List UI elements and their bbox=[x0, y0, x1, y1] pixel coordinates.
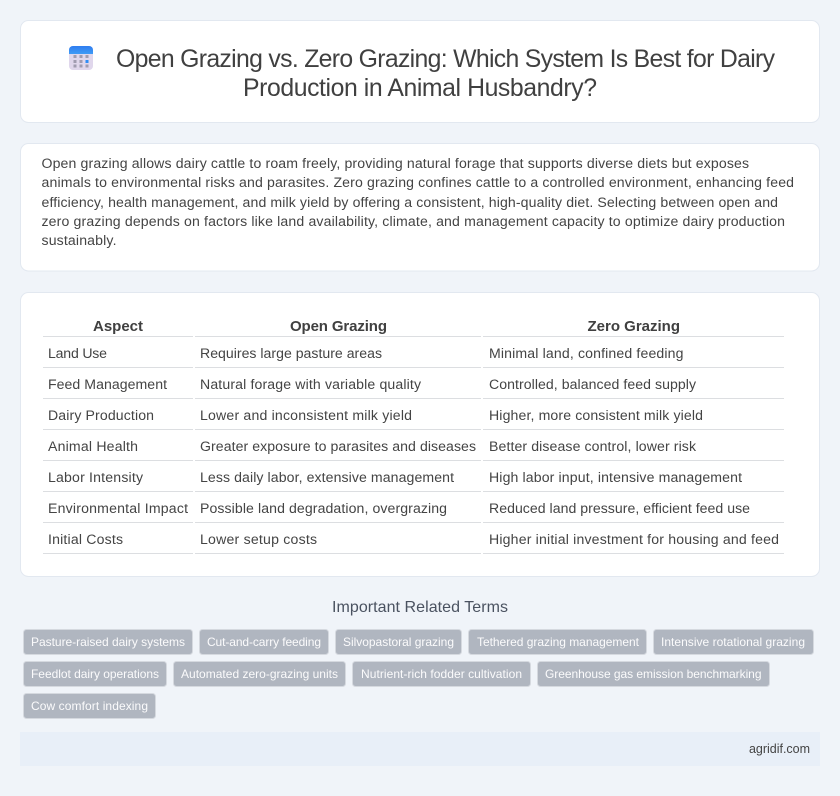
row: initial costs: Initial Costs bbox=[48, 531, 123, 547]
row: initial costs: Higher initial investment for housing and feed bbox=[489, 531, 779, 547]
table header: Aspect bbox=[93, 318, 143, 335]
text block: introduction paragraph: animals to environmental risks and parasites. Zero grazing confines cattle to a controlled environment, enhancing feed bbox=[42, 174, 794, 190]
row: initial costs: Lower setup costs bbox=[200, 531, 317, 547]
tag: Cow comfort indexing bbox=[31, 699, 148, 713]
row: land use: Land Use bbox=[48, 345, 107, 361]
row: dairy production: Lower and inconsistent milk yield bbox=[200, 407, 412, 423]
tag: Cut-and-carry feeding bbox=[207, 635, 321, 649]
tag: Intensive rotational grazing bbox=[661, 635, 805, 649]
row: labor intensity: Labor Intensity bbox=[48, 469, 144, 485]
tag bbox=[24, 694, 156, 718]
tag: Pasture-raised dairy systems bbox=[31, 635, 185, 649]
row: environmental impact: Possible land degradation, overgrazing bbox=[200, 500, 447, 516]
tag: Automated zero-grazing units bbox=[181, 667, 338, 681]
row: land use bbox=[43, 345, 784, 368]
row: dairy production: Higher, more consistent milk yield bbox=[489, 407, 703, 423]
icon: calendar bbox=[69, 46, 93, 70]
text block: introduction paragraph: Open grazing allows dairy cattle to roam freely, providing natural forage that supports diverse diets but exposes bbox=[42, 155, 749, 171]
row: labor intensity bbox=[43, 469, 784, 492]
tag bbox=[24, 630, 192, 654]
panel: title card bbox=[20, 20, 820, 122]
panel: comparison table bbox=[20, 292, 820, 576]
row: dairy production: Dairy Production bbox=[48, 407, 154, 423]
tag bbox=[538, 662, 770, 686]
text block: introduction paragraph bbox=[42, 155, 794, 248]
footer: agridif.com bbox=[749, 742, 810, 756]
tag bbox=[200, 630, 328, 654]
table header bbox=[43, 318, 784, 336]
tag bbox=[654, 630, 814, 654]
row: feed management: Feed Management bbox=[48, 376, 167, 392]
tag bbox=[174, 662, 346, 686]
table header: Zero Grazing bbox=[588, 318, 680, 335]
row: environmental impact: Reduced land pressure, efficient feed use bbox=[489, 500, 750, 516]
row: animal health: Greater exposure to parasites and diseases bbox=[200, 438, 476, 454]
tag: Feedlot dairy operations bbox=[31, 667, 159, 681]
row: land use: Requires large pasture areas bbox=[200, 345, 382, 361]
text block: introduction paragraph: efficiency, health management, and milk yield by offering a consistent, high-quality diet. Selecting between open and bbox=[42, 194, 778, 210]
footer bbox=[20, 732, 820, 766]
title: Open Grazing vs. Zero Grazing: Which System Is Best for Dairy bbox=[116, 46, 776, 73]
table header: Open Grazing bbox=[290, 318, 387, 335]
row: feed management: Controlled, balanced feed supply bbox=[489, 376, 697, 392]
panel: introduction bbox=[20, 144, 820, 271]
title: Production in Animal Husbandry? bbox=[243, 75, 597, 102]
tag: Greenhouse gas emission benchmarking bbox=[545, 667, 762, 681]
row: environmental impact: Environmental Impact bbox=[48, 500, 188, 516]
row: environmental impact bbox=[43, 500, 784, 522]
row: feed management: Natural forage with variable quality bbox=[200, 376, 422, 392]
tag bbox=[468, 630, 646, 654]
tags: related terms bbox=[24, 630, 814, 718]
row: labor intensity: High labor input, intensive management bbox=[489, 469, 742, 485]
row: animal health: Better disease control, lower risk bbox=[489, 438, 697, 454]
row: land use: Minimal land, confined feeding bbox=[489, 345, 684, 361]
row: labor intensity: Less daily labor, extensive management bbox=[200, 469, 454, 485]
row: dairy production bbox=[43, 407, 784, 430]
row: animal health: Animal Health bbox=[48, 438, 138, 454]
text block: introduction paragraph: sustainably. bbox=[42, 232, 116, 248]
row: initial costs bbox=[43, 531, 784, 554]
tag bbox=[24, 662, 166, 686]
row: feed management bbox=[43, 376, 784, 398]
title bbox=[116, 46, 776, 102]
tag bbox=[336, 630, 462, 654]
text block: introduction paragraph: zero grazing depends on factors like land availability, climate, and management capacity to optimize dairy production bbox=[42, 213, 785, 229]
tag: Nutrient-rich fodder cultivation bbox=[361, 667, 522, 681]
tag: Tethered grazing management bbox=[477, 635, 640, 649]
tag: Silvopastoral grazing bbox=[343, 635, 454, 649]
tag bbox=[352, 662, 530, 686]
row: animal health bbox=[43, 438, 784, 460]
heading: important related terms: Important Related Terms bbox=[332, 599, 508, 616]
